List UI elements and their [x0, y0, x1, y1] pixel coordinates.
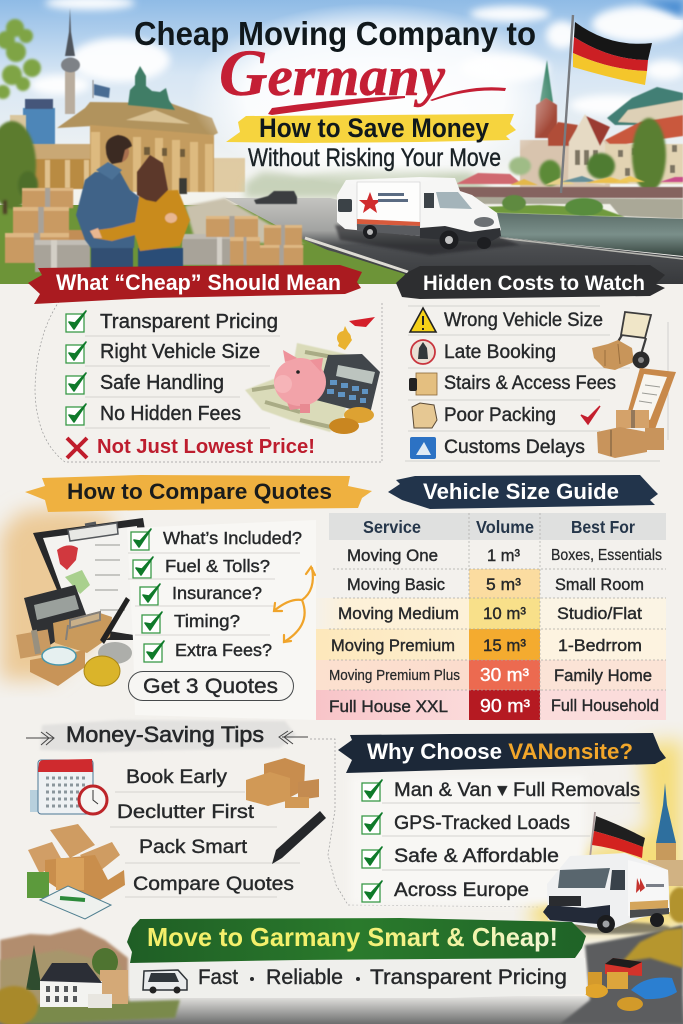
check item: Across Europe	[394, 879, 529, 901]
row: Moving Premium Plus: Moving Premium Plus	[329, 667, 460, 684]
customs icon	[410, 437, 436, 459]
check item: Man & Van ▾ Full Removals	[394, 779, 640, 801]
corner sky deepening	[640, 0, 683, 18]
row: Moving Premium Plus: Family Home	[554, 666, 652, 685]
lower hills	[0, 950, 130, 1010]
German flag on pole	[561, 15, 652, 193]
glass tower	[23, 99, 55, 145]
check item: Transparent Pricing	[100, 310, 278, 333]
river	[497, 213, 683, 256]
row: Moving One: Moving One	[347, 546, 438, 565]
truck icon	[143, 970, 187, 994]
dark heading banner	[396, 265, 665, 299]
row: Full House XXL	[329, 696, 659, 716]
header row: Service	[363, 517, 421, 537]
dashed outline	[310, 739, 540, 907]
Stairs and Access Fees: Stairs & Access Fees	[444, 372, 616, 394]
town trees	[509, 118, 666, 192]
row: Full House XXL: 90 m³	[480, 696, 530, 716]
right side white	[350, 775, 585, 905]
call to action banner	[127, 918, 586, 998]
title glow	[190, 3, 560, 187]
title: Cheap Moving Company to Germany	[134, 3, 560, 187]
German flag and coins	[584, 958, 677, 1011]
heading: Money-Saving Tips	[66, 722, 264, 747]
Declutter First: Declutter First	[117, 801, 255, 823]
Fast: Fast	[198, 965, 238, 989]
row: Moving Premium	[331, 636, 642, 655]
panel: money-saving tips	[26, 720, 540, 919]
tree behind house	[92, 948, 118, 976]
subtitle: How to Save Money	[259, 113, 489, 143]
dot	[356, 977, 360, 981]
Wrong Vehicle Size: Wrong Vehicle Size	[444, 309, 603, 331]
check item: GPS-Tracked Loads	[394, 812, 570, 834]
Late Booking: Late Booking	[444, 341, 556, 363]
hero illustration: Berlin street scene	[0, 0, 683, 284]
distant haze and trees	[245, 168, 500, 198]
panel: why choose VANonsite	[338, 733, 683, 934]
row: Moving Basic	[347, 575, 644, 594]
row: Moving Premium Plus: 30 m³	[480, 665, 529, 685]
check item: Safe & Affordable	[394, 845, 559, 867]
warning icon	[410, 308, 436, 332]
orange wash	[0, 508, 120, 680]
row: Moving Premium Plus	[329, 665, 652, 685]
cafe umbrellas	[456, 173, 683, 198]
tagline: Without Risking Your Move	[248, 144, 501, 172]
panel: what cheap should mean	[28, 265, 382, 462]
row: Moving Medium: 10 m³	[483, 604, 526, 623]
row: Full House XXL: Full House XXL	[329, 697, 448, 716]
near pavement	[185, 198, 305, 245]
white list backing	[127, 520, 316, 720]
late booking icon	[411, 340, 435, 364]
dot	[250, 977, 254, 981]
check item	[128, 528, 302, 553]
orange heading banner	[25, 475, 372, 512]
stacked boxes	[246, 758, 319, 808]
moving boxes left	[5, 188, 90, 272]
heading: What “Cheap” Should Mean	[56, 270, 341, 295]
white house	[40, 963, 128, 1008]
autumn bushes right	[622, 928, 683, 968]
church spire	[648, 783, 683, 886]
hand truck with boxes	[592, 312, 651, 370]
kerb	[305, 238, 408, 272]
row: Full House XXL: Full Household	[551, 696, 659, 715]
check item	[144, 640, 272, 662]
heading: Vehicle Size Guide	[423, 479, 619, 504]
red cross item: Not Just Lowest Price!	[97, 435, 315, 458]
pile of boxes and books	[27, 824, 125, 919]
paper background	[0, 283, 683, 1024]
clipboard and boxes	[597, 368, 676, 458]
title line: Cheap Moving Company to	[134, 15, 536, 52]
row: Moving One: 1 m³	[487, 546, 520, 565]
row: Moving Medium: Moving Medium	[338, 604, 459, 623]
table	[316, 513, 666, 720]
right town	[520, 87, 683, 188]
Customs Delays: Customs Delays	[444, 436, 585, 458]
calendar and clock	[30, 759, 107, 814]
curb line on road	[500, 238, 683, 259]
check item	[66, 371, 240, 397]
Get 3 Quotes pill	[128, 672, 294, 700]
bottom scenery	[0, 925, 683, 1024]
panel: vehicle size guide	[316, 475, 666, 720]
red swoosh	[268, 87, 506, 115]
clouds	[30, 0, 683, 115]
check item: Right Vehicle Size	[100, 340, 260, 363]
red heading banner	[28, 265, 362, 304]
check item: No Hidden Fees	[100, 402, 241, 425]
Transparent Pricing: Transparent Pricing	[370, 965, 567, 989]
poor packing icon	[412, 403, 437, 428]
row: Moving Premium: 15 m³	[483, 636, 526, 655]
autumn tree left	[0, 986, 38, 1024]
check item	[135, 611, 270, 635]
panel: hidden costs to watch	[396, 265, 676, 461]
clipboard, calculator, boxes and coins	[16, 518, 150, 686]
ground base	[0, 205, 330, 284]
Brandenburg gate	[10, 102, 245, 194]
white moving van	[335, 177, 520, 255]
check item: Timing?	[174, 611, 240, 631]
table grid	[329, 513, 666, 720]
couple from behind	[76, 135, 190, 268]
fir tree	[26, 945, 42, 990]
church	[535, 60, 557, 138]
white van front view	[543, 853, 670, 934]
row: Moving One	[347, 546, 662, 565]
pen	[272, 811, 326, 864]
Pack Smart: Pack Smart	[139, 836, 248, 858]
row: Moving Basic: Small Room	[555, 575, 644, 594]
check item: What’s Included?	[163, 528, 302, 548]
heading: Hidden Costs to Watch	[423, 271, 645, 295]
left trees	[0, 19, 41, 214]
small German flag	[590, 812, 645, 858]
outline and dividers	[405, 306, 668, 461]
check item	[135, 583, 275, 606]
check item: Safe Handling	[100, 371, 224, 394]
red tick	[581, 406, 600, 424]
gray heading banner	[40, 720, 296, 752]
stone quay and bushes	[472, 195, 683, 219]
row: Moving One: Boxes, Essentials	[551, 547, 662, 564]
row: Moving Medium	[338, 604, 642, 623]
piggy bank, calculator and coins	[245, 317, 380, 434]
mountains	[0, 928, 128, 1000]
header row: Best For	[571, 517, 635, 537]
heading: How to Compare Quotes	[67, 479, 332, 504]
autumn bush behind van	[668, 887, 683, 923]
green brush banner	[127, 918, 586, 963]
table fills	[316, 513, 666, 720]
Reliable: Reliable	[266, 965, 343, 989]
row: Moving Medium: Studio/Flat	[557, 604, 642, 623]
row: Moving Premium: Moving Premium	[331, 636, 455, 655]
dashed outline	[35, 300, 382, 462]
header row	[363, 517, 635, 537]
parked car	[254, 191, 297, 204]
orange curved arrows	[274, 567, 315, 642]
banner text: Move to Garmany Smart & Cheap!	[147, 922, 558, 952]
dividers	[110, 792, 300, 897]
yellow wash	[530, 740, 683, 930]
Poor Packing: Poor Packing	[444, 404, 556, 426]
row: Moving Premium: 1-Bedrrom	[558, 636, 642, 655]
panel: how to compare quotes	[0, 475, 372, 720]
row: Moving Basic: 5 m³	[486, 575, 521, 594]
check item	[362, 845, 570, 870]
navy heading banner	[338, 733, 666, 773]
Compare Quotes: Compare Quotes	[133, 873, 294, 895]
moving boxes right	[182, 216, 303, 265]
grass verge	[300, 243, 405, 284]
Book Early: Book Early	[126, 766, 227, 788]
check item: Extra Fees?	[175, 640, 272, 660]
navy heading banner	[388, 475, 658, 509]
check item	[66, 402, 270, 428]
stairs icon	[409, 373, 437, 395]
check item: Insurance?	[172, 583, 262, 603]
quadriga statue	[93, 66, 175, 110]
arrow right	[279, 731, 308, 744]
tower	[61, 8, 80, 114]
bottom gray band	[0, 996, 683, 1024]
Get 3 Quotes pill: Get 3 Quotes	[143, 674, 278, 698]
check item	[128, 556, 275, 579]
header row: Volume	[476, 517, 534, 537]
heading: Why Choose VANonsite?	[367, 739, 633, 764]
arrow left	[26, 732, 54, 745]
yellow brush	[226, 114, 516, 143]
grass foreground	[20, 1000, 180, 1024]
row: Moving Basic: Moving Basic	[347, 575, 445, 594]
white strip	[130, 958, 586, 998]
road and ground right	[560, 925, 683, 1024]
Germany script: Germany	[219, 37, 446, 110]
check item: Fuel & Tolls?	[165, 556, 270, 576]
sky	[0, 0, 683, 215]
road	[225, 198, 683, 284]
